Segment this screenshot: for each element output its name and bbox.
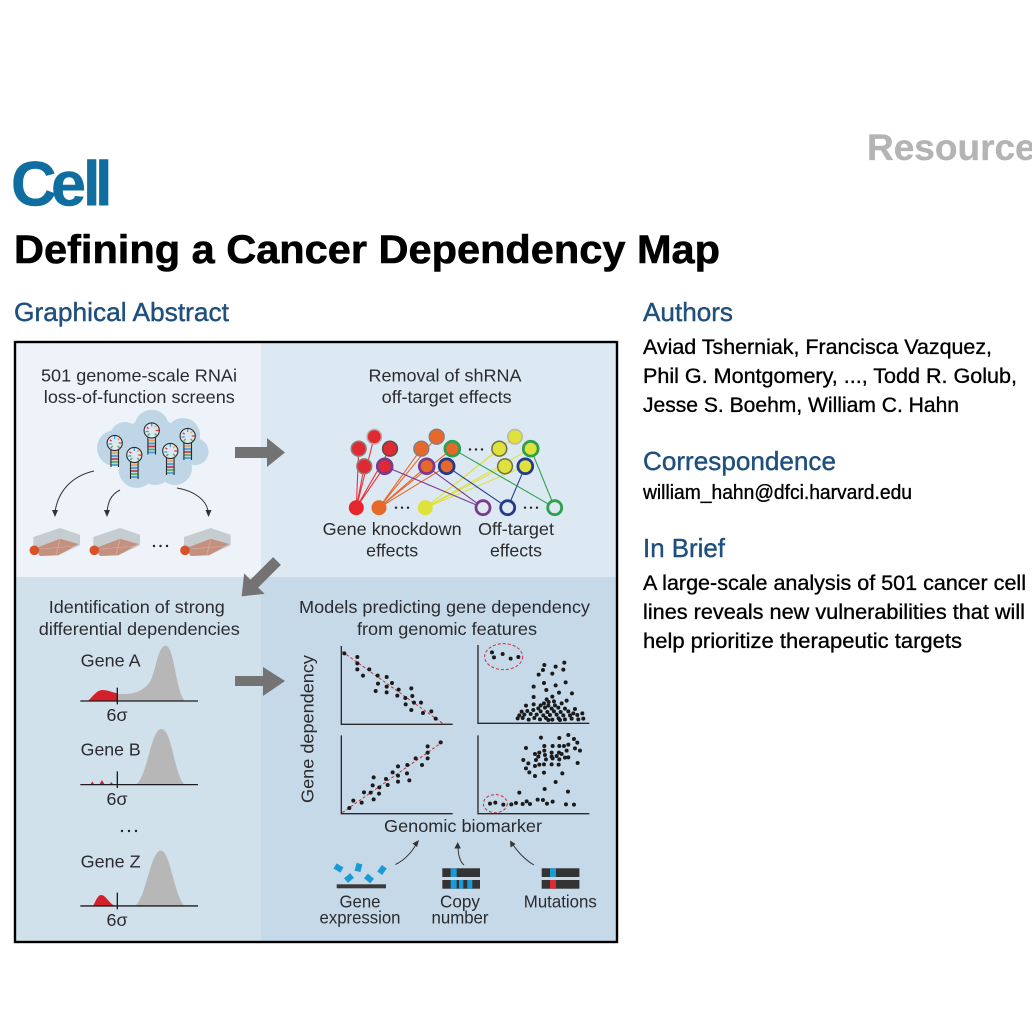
- heading: RNAi screens: 501 genome-scale RNAi: [41, 366, 237, 386]
- chart: gene B: 6σ: [106, 789, 128, 809]
- label: gene expression: expression: [320, 907, 400, 927]
- heading: in brief: In Brief: [643, 533, 726, 563]
- icon: shRNA cloud: [97, 410, 208, 488]
- chart: gene Z: 6σ: [106, 910, 128, 930]
- panel: differential dependencies: [15, 577, 261, 942]
- chart: gene A: [80, 646, 198, 725]
- in brief summary: A large-scale analysis of 501 cancer cell: [643, 570, 1026, 595]
- heading: differential dependencies: Identification of strong: [49, 597, 225, 617]
- graphical abstract figure: [15, 342, 617, 942]
- chart: gene B: [80, 729, 198, 809]
- heading: correspondence: Correspondence: [643, 446, 836, 476]
- icon: mutations: [542, 868, 579, 889]
- label: copy number: number: [432, 907, 489, 927]
- arrow: screens to off-target removal: [235, 438, 285, 467]
- correspondence email: william_hahn@dfci.harvard.edu: [642, 482, 912, 504]
- labels: off-target effects: Off-target: [478, 519, 554, 539]
- labels: gene knockdown effects: effects: [366, 541, 418, 561]
- heading: off-target removal: Removal of shRNA: [368, 366, 522, 386]
- author list: Phil G. Montgomery, ..., Todd R. Golub,: [643, 363, 1017, 388]
- journal logo: Cell: [11, 150, 113, 220]
- labels: gene knockdown effects: [323, 519, 462, 561]
- label: copy number: [432, 891, 489, 927]
- arrows: cloud to flasks: [52, 471, 212, 517]
- in brief summary: [643, 570, 1026, 653]
- label: gene expression: [320, 891, 400, 927]
- in brief summary: lines reveals new vulnerabilities that will: [643, 599, 1025, 624]
- heading: RNAi screens: [41, 366, 237, 407]
- article type label: Resource: [867, 127, 1032, 168]
- arrow: dependencies to models: [235, 667, 285, 696]
- heading: predictive models: [299, 597, 590, 639]
- labels: off-target effects: effects: [490, 541, 542, 561]
- in brief summary: help prioritize therapeutic targets: [643, 628, 962, 653]
- chart: outlier dependency bottom: [478, 733, 589, 814]
- label: gene expression: Gene: [340, 891, 380, 911]
- panel: RNAi screens: [15, 342, 261, 577]
- arrows: features to biomarker: [396, 840, 534, 865]
- chart: positive correlation: [341, 735, 453, 814]
- chart: gene A: Gene A: [81, 651, 141, 671]
- chart: gene B: Gene B: [81, 740, 141, 760]
- title: Defining a Cancer Dependency Map: [14, 228, 720, 272]
- heading: predictive models: Models predicting gene dependency: [299, 597, 590, 617]
- chart: gene Z: [80, 851, 198, 930]
- gene distributions: [80, 646, 198, 930]
- heading: differential dependencies: [39, 597, 240, 639]
- author list: Jesse S. Boehm, William C. Hahn: [643, 392, 959, 417]
- chart: negative correlation: [341, 646, 453, 724]
- chart: gene Z: Gene Z: [81, 852, 141, 872]
- labels: off-target effects: [478, 519, 554, 561]
- chart: gene A: 6σ: [106, 705, 128, 725]
- icon: culture flasks: [30, 528, 231, 556]
- author list: Aviad Tsherniak, Francisca Vazquez,: [643, 334, 992, 359]
- heading: authors: Authors: [643, 297, 733, 327]
- panel: predictive models: [261, 577, 617, 942]
- heading: predictive models: from genomic features: [357, 619, 537, 639]
- chart: outlier dependency top: [478, 644, 589, 723]
- heading: off-target removal: [368, 366, 522, 407]
- scatter plots: [341, 644, 589, 814]
- label: mutations: Mutations: [524, 891, 597, 911]
- label: copy number: Copy: [440, 891, 480, 911]
- heading: differential dependencies: differential dependencies: [39, 619, 240, 639]
- icon: copy number: [442, 868, 480, 889]
- figure border: [15, 342, 617, 942]
- arrow: off-target removal to dependencies: [231, 551, 287, 607]
- network diagram: [349, 429, 562, 515]
- author list: [643, 334, 1017, 417]
- labels: gene knockdown effects: Gene knockdown: [323, 519, 462, 539]
- heading: graphical abstract: Graphical Abstract: [14, 297, 230, 327]
- y-axis label: Gene dependency: [298, 655, 318, 803]
- ellipsis between genes: [121, 830, 137, 832]
- x-axis label: Genomic biomarker: [384, 816, 542, 836]
- heading: RNAi screens: loss-of-function screens: [44, 387, 235, 407]
- panel: off-target removal: [261, 342, 617, 577]
- icon: gene expression: [334, 863, 387, 888]
- heading: off-target removal: off-target effects: [382, 387, 512, 407]
